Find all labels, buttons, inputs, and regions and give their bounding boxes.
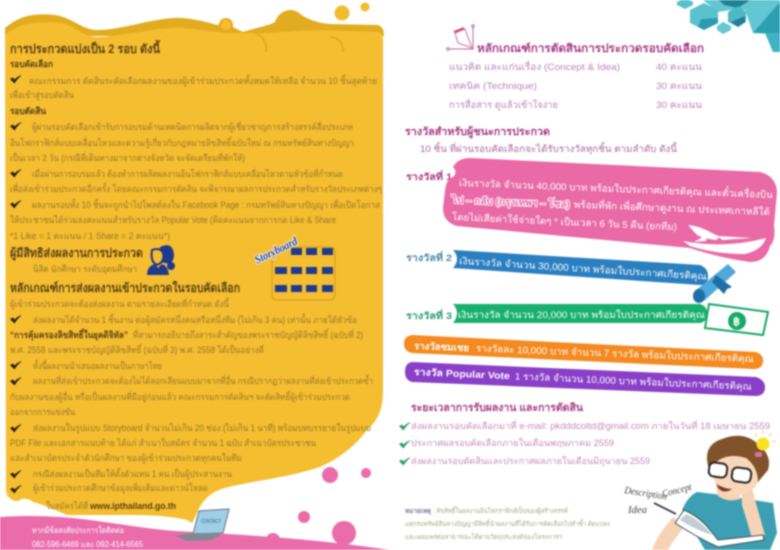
- green ribbon: [453, 304, 707, 323]
- text block: submission rules: “การคุ้มครองลิขสิทธิ์ในยุคดิจิทัล”: [10, 328, 128, 341]
- icon: storyboard: Storyboard: [252, 234, 300, 267]
- text block: final round: ผลงานรอบทั้ง 10 ชิ้นจะถูกนำไปโพสต์ลงใน Facebook Page : กรมทรัพย์สินทางปัญญา เพื่อเปิดโอกาส: [32, 198, 380, 211]
- text block: final round: เพื่อส่งเข้าร่วมประกวดอีกครั้ง โดยคณะกรรมการตัดสิน จะพิจารณาผลการประกวดสำหรับรางวัลประเภทต่างๆ: [10, 182, 382, 194]
- text block: submission rules: ส่งผลงานในรูปแบบ Storyboard จำนวนไม่เกิน 20 ช่อง (ไม่เกิน 1 นาที) พร้อมบทบรรยายในรูปแบบ: [33, 423, 371, 434]
- heading: two rounds: การประกวดแบ่งเป็น 2 รอบ ดังนี้: [10, 39, 161, 56]
- icon: storyboard: [252, 234, 335, 300]
- mouth: [716, 484, 732, 492]
- text: prize intro: 10 ชิ้น ที่ผ่านรอบคัดเลือกจะได้รับรางวัลทุกชิ้น ตามลำดับ ดังนี้: [420, 142, 678, 155]
- heading: judging criteria with pen icon: หลักเกณฑ์การตัดสินการประกวดรอบคัดเลือก: [477, 42, 704, 55]
- text block: submission rules: ผู้เข้าร่วมประกวดศึกษาข้อมูลเพิ่มเติมและดาวน์โหลด: [33, 481, 208, 494]
- text block: submission rules: ผลงานที่ส่งเข้าประกวดจะต้องไม่ได้ลอกเลียนแบบมาจากที่อื่น กรณีปรากฏว่าผลงานที่ส่งเข้าประกวดซ้ำ: [33, 374, 373, 386]
- note text: : ลิขสิทธิ์ในผลงานอินโฟกราฟิกส์เป็นของผู้สร้างสรรค์: [433, 506, 568, 515]
- icon: diploma scroll: [693, 264, 736, 303]
- icon: laptop: CONTACT: [201, 519, 221, 525]
- orange honourable mention ribbon: รางวัลละ 10,000 บาท จำนวน 7 รางวัล พร้อมใบประกาศเกียรติคุณ: [476, 342, 754, 365]
- text block: submission rules: กับผลงานของผู้อื่น หรือเป็นผลงานที่มีอยู่ก่อนแล้ว คณะกรรมการตัดสินฯ จะตัดสิทธิ์ผู้เข้าร่วมประกวด: [10, 390, 350, 403]
- prize 2: รางวัลที่ 2: [406, 250, 452, 264]
- text block: submission rules: ที่สามารถอธิบายถึงสาระสำคัญของพระราชบัญญัติลิขสิทธิ์ (ฉบับที่ 2): [133, 328, 363, 340]
- text block: submission rules: ทั้งนี้ผลงานนำเสนอผลงานเป็นภาษาไทย: [33, 359, 162, 371]
- text block: final round: รอบตัดสิน: [10, 106, 47, 116]
- prize 1: [406, 158, 777, 262]
- text block: submission rules: กรณีส่งผลงานเป็นทีมให้ตั้งตัวแทน 1 คน เป็นผู้ประสานงาน: [33, 467, 232, 480]
- prize 1: เงินรางวัล จำนวน 40,000 บาท พร้อมใบประกาศเกียรติคุณ และตั๋วเครื่องบิน: [459, 176, 774, 201]
- words: concept, description, idea: Description: [623, 485, 668, 503]
- hair: [707, 436, 769, 482]
- bulb: [755, 430, 776, 457]
- table: judging scores: การสื่อสาร ดูแล้วเข้าใจง่าย: [449, 98, 558, 111]
- text block: submission rules: ใบสมัครได้ที่: [46, 499, 88, 511]
- words: concept, description, idea: Idea: [627, 505, 647, 516]
- icon: two people: [147, 245, 175, 275]
- list: timeline: ส่งผลงานรอบคัดเลือกมาที่ e-mail: pkdddcoltd@gmail.com ภายในวันที่ 18 เมษายน 2559: [411, 419, 770, 431]
- words: concept, description, idea: Concept: [661, 482, 693, 500]
- prize 2: [406, 250, 736, 303]
- text block: final round: *1 Like = 1 คะแนน / 1 Share = 2 คะแนน*): [10, 231, 170, 241]
- text block: final round: เมื่อผ่านการอบรมแล้ว ต้องทำการผลิตผลงานอินโฟกราฟิกส์แบบเคลื่อนไหวตามหัวข้อที่กำหนด: [32, 167, 343, 179]
- purple popular vote ribbon: 1 รางวัล จำนวน 10,000 บาท พร้อมใบประกาศเกียรติคุณ: [515, 370, 752, 393]
- prize 3: รางวัลที่ 3: [406, 308, 452, 322]
- icon: pen nib: [447, 25, 474, 50]
- text block: selection round: คณะกรรมการ ตัดสินระคัดเลือกผลงานของผู้เข้าร่วมประกวดทั้งหมดให้เหลือ จำนวน 10 ชิ้นสุดท้าย: [29, 74, 377, 87]
- text block: final round: เป็นเวลา 2 วัน (กรณีที่เดินทางมาจากต่างจังหวัด จะจัดเตรียมที่พักให้): [10, 151, 245, 163]
- decorative bubbles: [220, 19, 343, 52]
- right arm: [741, 480, 765, 538]
- footer contact text: หากมีข้อสงสัยประการใดติดต่อ: [32, 526, 124, 535]
- heading: prizes: รางวัลสำหรับผู้ชนะการประกวด: [405, 125, 550, 139]
- prize 1: ไป – กลับ (กรุงเทพฯ – โซล): [451, 194, 570, 211]
- shirt: [682, 492, 777, 550]
- prize 1: พร้อมที่พัก เพื่อศึกษาดูงาน ณ ประเทศเกาหลีใต้: [574, 198, 770, 218]
- text block: selection round: [10, 58, 377, 101]
- footer contact text: [32, 526, 144, 549]
- footer contact text: 082-596-6469 และ 092-414-6565: [32, 540, 144, 549]
- heading: timeline: ระยะเวลาการรับผลงาน และการตัดสิน: [411, 402, 584, 414]
- text block: submission rules: PDF File และเอกสารแนบท้าย ได้แก่ สำเนาใบสมัคร จำนวน 1 ฉบับ สำเนาบัตรประชาชน: [10, 438, 316, 448]
- text block: final round: ผู้ผ่านรอบคัดเลือกเข้ารับการอบรมด้านเทคนิคการผลิตจากผู้เชี่ยวชาญการสร้างสรรค์สื่อประเภท: [32, 120, 353, 133]
- note text: หมายเหตุ: [405, 508, 431, 515]
- note text: และเผยแพร่ต่อสาธารณะได้ตามวัตถุประสงค์ของโครงการฯ: [405, 533, 562, 541]
- purple popular vote ribbon: รางวัล Popular Vote: [414, 367, 510, 382]
- pencil: [654, 503, 676, 514]
- orange honourable mention ribbon: [404, 335, 763, 369]
- text: eligibility: นิสิต นักศึกษา ระดับอุดมศึกษา: [33, 264, 137, 275]
- text block: submission rules: www.ipthailand.go.th: [89, 501, 176, 511]
- pink ribbon: [443, 158, 777, 262]
- text block: submission rules: ออกจากการแข่งขัน: [10, 407, 75, 417]
- table: judging scores: [449, 60, 703, 111]
- face: [710, 454, 762, 496]
- glasses: [708, 462, 752, 483]
- icon: airplane with white swoosh: [683, 225, 766, 254]
- neck: [716, 486, 740, 500]
- note text: [405, 506, 610, 541]
- text block: submission rules: ผู้เข้าร่วมประกวดจะต้องส่งผลงาน ตามรายละเอียดที่กำหนด ดังนี้: [10, 297, 230, 310]
- icon: laptop: [175, 509, 229, 541]
- table: judging scores: 30 คะแนน: [656, 81, 703, 92]
- pink decorative circles: [266, 467, 371, 547]
- blue ribbon: [453, 250, 708, 285]
- list: timeline: [399, 419, 770, 467]
- text block: submission rules: และสำเนาบัตรประจำตัวนักศึกษา ของผู้เข้าร่วมประกวดทุกคนในทีม: [10, 453, 242, 464]
- table: judging scores: 30 คะแนน: [656, 100, 703, 111]
- panel: yellow rules panel: [5, 2, 384, 523]
- text block: selection round: รอบคัดเลือก: [10, 58, 53, 69]
- list: timeline: ส่งผลงานรอบตัดสินและประกาศผลภายในเดือนมิถุนายน 2559: [411, 456, 650, 467]
- icon: banknote: ฿: [733, 316, 740, 328]
- prize 1: รางวัลที่ 1: [406, 169, 453, 183]
- purple popular vote ribbon: [405, 362, 765, 396]
- text block: submission rules: ส่งผลงานได้จำนวน 1 ชิ้นงาน ต่อผู้สมัครหนึ่งคนหรือหนึ่งทีม (ไม่เกิน 3 คน) เท่านั้น ภายใต้หัวข้อ: [33, 313, 357, 326]
- left arm: [652, 517, 685, 550]
- text block: final round: อินโฟกราฟิกส์แบบเคลื่อนไหวและความรู้เกี่ยวกับกฎหมายลิขสิทธิ์ฉบับใหม่ ณ กรมทรัพย์สินทางปัญญา: [10, 136, 354, 149]
- prize 2: เงินรางวัล จำนวน 30,000 บาท พร้อมใบประกาศเกียรติคุณ: [459, 255, 707, 283]
- text block: submission rules: พ.ศ. 2558 และพระราชบัญญัติลิขสิทธิ์ (ฉบับที่ 3) พ.ศ. 2558 ได้เป็นอย่างดี: [10, 343, 264, 355]
- list: timeline: ประกาศผลรอบคัดเลือกภายในเดือนพฤษภาคม 2559: [411, 438, 614, 448]
- text block: final round: [10, 106, 382, 241]
- icon: teal hexagon cluster: [677, 0, 780, 52]
- heading: judging criteria with pen icon: [447, 25, 704, 55]
- panel: pink footer band: [0, 516, 390, 550]
- heading: eligibility: ผู้มีสิทธิส่งผลงานการประกวด: [10, 246, 143, 261]
- illustration: boy reading a book: [623, 430, 777, 550]
- gold circles: [334, 2, 370, 20]
- table: judging scores: 40 คะแนน: [656, 62, 703, 73]
- prize 1: โดยไม่เสียค่าใช้จ่ายใดๆ * เป็นเวลา 6 วัน 5 คืน (ยกทีม): [452, 210, 677, 233]
- orange honourable mention ribbon: รางวัลชมเชย: [414, 341, 469, 354]
- table: judging scores: เทคนิค (Technique): [449, 81, 537, 92]
- book: [675, 510, 764, 547]
- prize 3: เงินรางวัล จำนวน 20,000 บาท พร้อมใบประกาศเกียรติคุณ: [458, 309, 705, 321]
- prize 3: [406, 304, 768, 335]
- icon: banknote: [705, 304, 768, 335]
- text block: final round: ให้ประชาชนได้ร่วมลงคะแนนสำหรับรางวัล Popular Vote (คิดคะแนนจากการกด Like & Share: [10, 215, 336, 225]
- text block: submission rules: [10, 297, 373, 511]
- heading: submission rules: หลักเกณฑ์การส่งผลงานเข้าประกวดในรอบคัดเลือก: [10, 280, 240, 295]
- words: concept, description, idea: [623, 482, 693, 516]
- text block: selection round: เพื่อเข้าสู่รอบตัดสิน: [10, 88, 74, 101]
- table: judging scores: แนวคิด และแก่นเรื่อง (Concept & Idea): [449, 60, 620, 73]
- note text: แต่กรมทรัพย์สินทางปัญญามีสิทธิ์นำผลงานที่ได้รับการคัดเลือกไปทำซ้ำ ดัดแปลง: [405, 519, 610, 528]
